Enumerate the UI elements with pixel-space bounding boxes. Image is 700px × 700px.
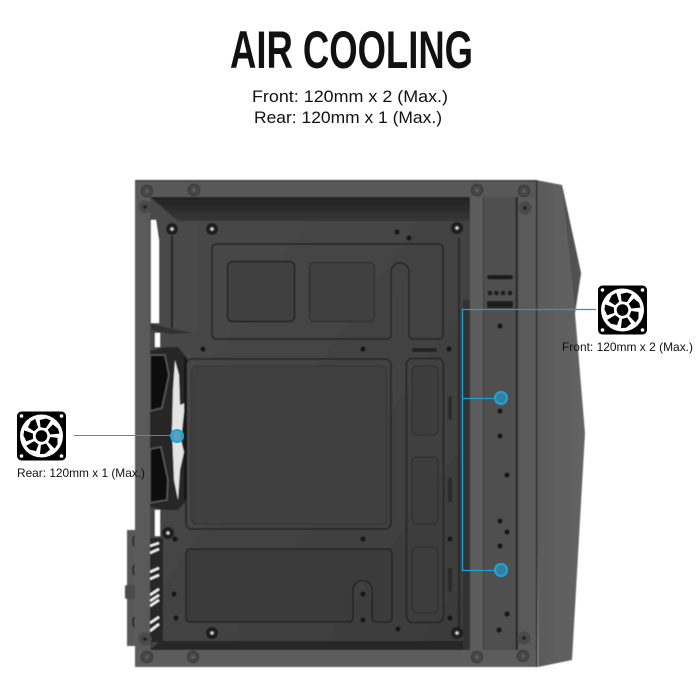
bottom inner wall [150, 641, 470, 650]
lower embossed panel [186, 549, 392, 622]
vertical slots and rail [448, 238, 470, 650]
upper embossed panel [212, 244, 443, 339]
top inner wall [150, 197, 470, 221]
rear slot stripes [150, 543, 159, 631]
frame rivets and pegs [138, 184, 532, 662]
left connector: rear fan [74, 430, 183, 442]
side inner panel [159, 221, 197, 332]
title: AIR COOLING [230, 21, 473, 80]
subtitle: cooling specifications: Rear: 120mm x 1 (Max.) [254, 108, 442, 127]
icon: rear fan [17, 412, 66, 460]
upper cutout left [228, 262, 294, 322]
rear expansion bracket [125, 530, 137, 646]
case body interior [150, 196, 470, 651]
middle embossed panel [186, 359, 391, 529]
front panel [536, 180, 585, 667]
label: front fan: Front: 120mm x 2 (Max.) [562, 340, 693, 354]
subtitle: cooling specifications: Front: 120mm x 2 (Max.) [252, 87, 448, 106]
right front column [470, 181, 538, 667]
plate screws and holes [162, 222, 463, 639]
upper cutout right [310, 262, 374, 322]
subtitle: cooling specifications [252, 87, 448, 127]
left side gaps showing background [151, 220, 159, 323]
computer case [125, 180, 585, 667]
narrow side panel with three cutouts [406, 358, 444, 622]
right connector: front fans [462, 310, 596, 576]
label: rear fan: Rear: 120mm x 1 (Max.) [17, 466, 145, 480]
rear fan [150, 347, 187, 510]
outer frame [135, 180, 537, 667]
icon: front fan [598, 286, 647, 334]
